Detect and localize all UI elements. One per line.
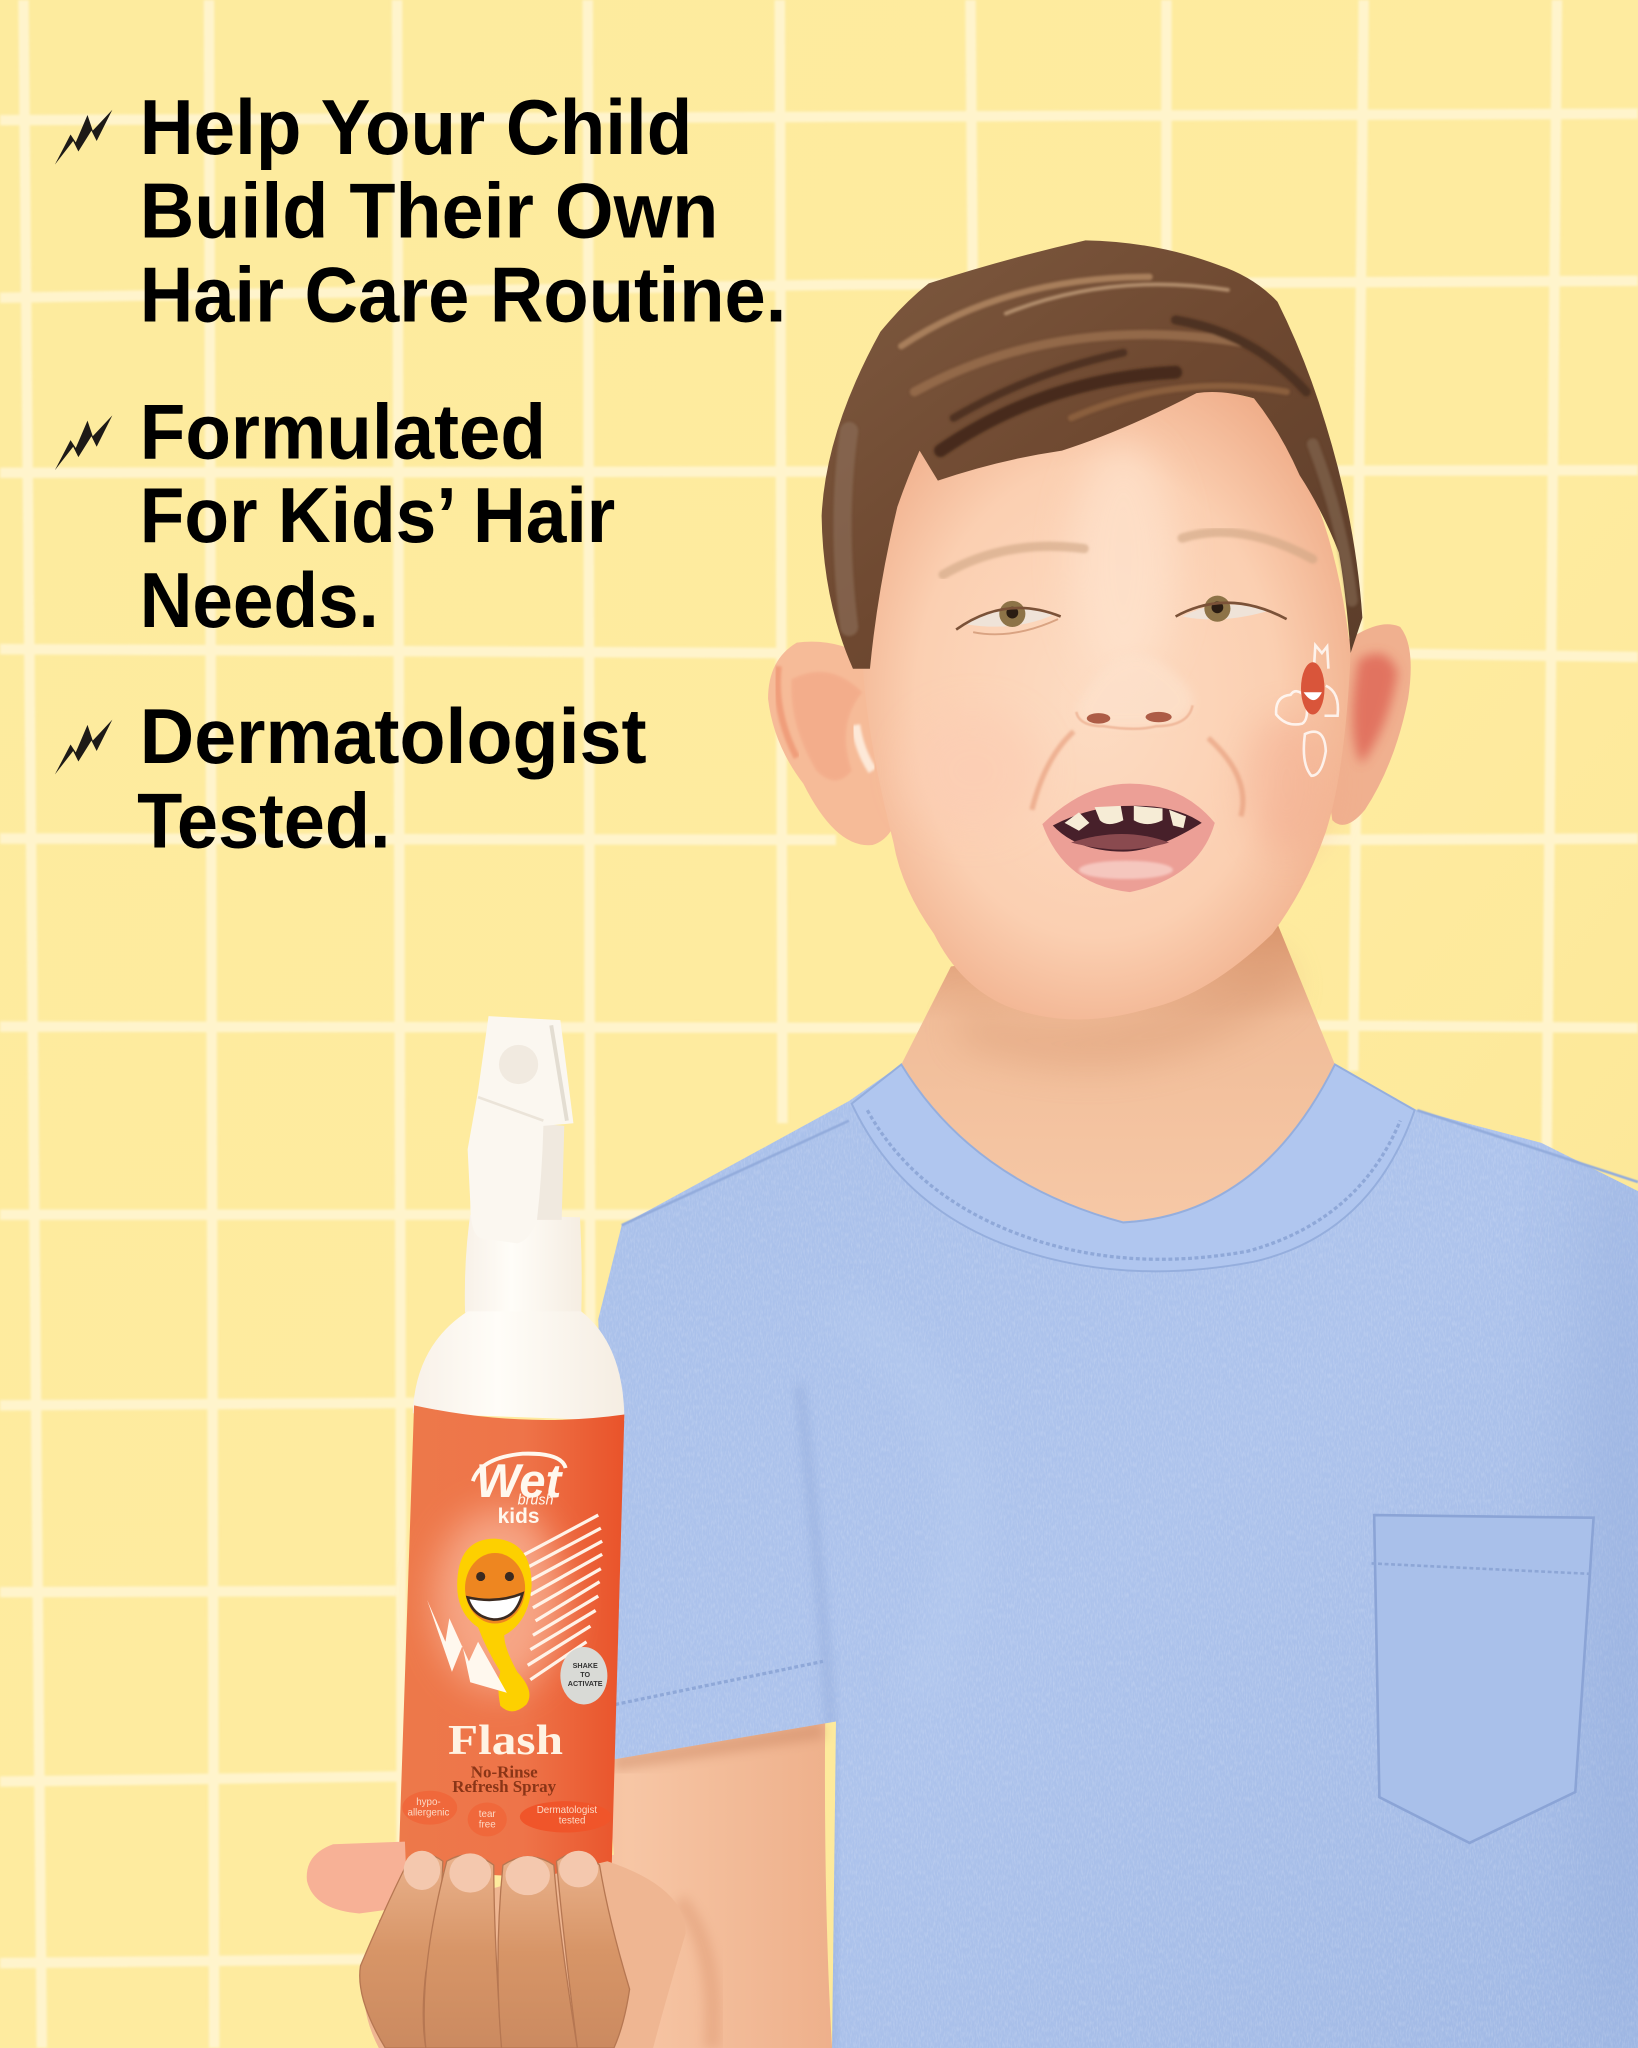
heading text [140, 387, 615, 644]
boy: right ear [1319, 624, 1411, 825]
boy: left ear [768, 642, 901, 845]
boy: arm and palm [379, 1685, 832, 2048]
boy: nose [1076, 655, 1193, 729]
boy: shirt [588, 1058, 1638, 2048]
claim badges: Dermatologist [537, 1805, 597, 1816]
nozzle stem [529, 1123, 564, 1220]
bottle collar [465, 1215, 582, 1313]
heading text [137, 692, 647, 865]
brush emoji [457, 1539, 532, 1711]
claim badges: tear [479, 1809, 496, 1820]
nozzle details [478, 1025, 567, 1121]
product descriptor: Refresh Spray [452, 1777, 557, 1796]
bottle shoulder [413, 1311, 624, 1421]
smile creases [1032, 731, 1243, 816]
claim badges: tested [559, 1815, 585, 1826]
boy: eyebrows [943, 532, 1313, 575]
product descriptor [452, 1763, 557, 1796]
palm [364, 1861, 686, 2048]
shake to activate badge: TO [580, 1671, 591, 1679]
bullet 3: dermatologist tested [55, 692, 647, 865]
hand holding the bottle [307, 1842, 686, 2048]
heading text: For Kids’ Hair [140, 471, 615, 559]
product descriptor: No-Rinse [471, 1763, 538, 1782]
boy: left eye [956, 601, 1061, 634]
fingers [360, 1854, 630, 2048]
boy: neck [901, 914, 1335, 1221]
product name Flash: Flash [448, 1718, 563, 1764]
logo wet brush kids [473, 1454, 566, 1528]
bottle trigger [468, 1016, 573, 1243]
heading text: Tested. [137, 777, 391, 865]
icon: lightning bullet [55, 110, 112, 165]
icon: lightning bullet [55, 720, 112, 775]
shirt pocket [1372, 1515, 1594, 1843]
bottle label [398, 1405, 624, 1881]
label glow [434, 1509, 564, 1691]
boy: face [863, 384, 1351, 1019]
shake to activate badge: SHAKE [573, 1662, 598, 1670]
speed lines [522, 1515, 602, 1680]
claim badges: free [479, 1819, 496, 1830]
side finger [307, 1842, 408, 1913]
heading text: Needs. [140, 556, 379, 644]
shake to activate badge: ACTIVATE [568, 1680, 603, 1688]
bullet 1: help your child [55, 83, 786, 338]
heading text [140, 83, 786, 338]
shake to activate badge [560, 1647, 607, 1704]
heading text: Formulated [140, 387, 546, 475]
sticker on cheek [1276, 645, 1338, 776]
boy: right eye [1176, 596, 1287, 622]
fingernails [404, 1851, 598, 1895]
heading text: Help Your Child [140, 83, 692, 171]
logo wet brush kids: kids [498, 1505, 539, 1528]
icon: lightning bullet [55, 415, 112, 470]
spray bottle [398, 1016, 624, 1881]
heading text: Build Their Own [140, 167, 718, 255]
heading text: Hair Care Routine. [140, 250, 786, 338]
logo wet brush kids: brush [518, 1493, 554, 1509]
boy: t-shirt collar [852, 1064, 1415, 1271]
bullet 2: formulated for kids [55, 387, 615, 644]
boy: hair [822, 240, 1362, 669]
boy: mouth [1042, 784, 1215, 892]
logo wet brush kids: Wet [476, 1454, 564, 1507]
claim badges: hypo- [416, 1797, 441, 1808]
lightning bolt on label [427, 1600, 507, 1693]
heading text: Dermatologist [140, 692, 647, 780]
claim badges [402, 1791, 611, 1836]
claim badges: allergenic [408, 1808, 449, 1819]
